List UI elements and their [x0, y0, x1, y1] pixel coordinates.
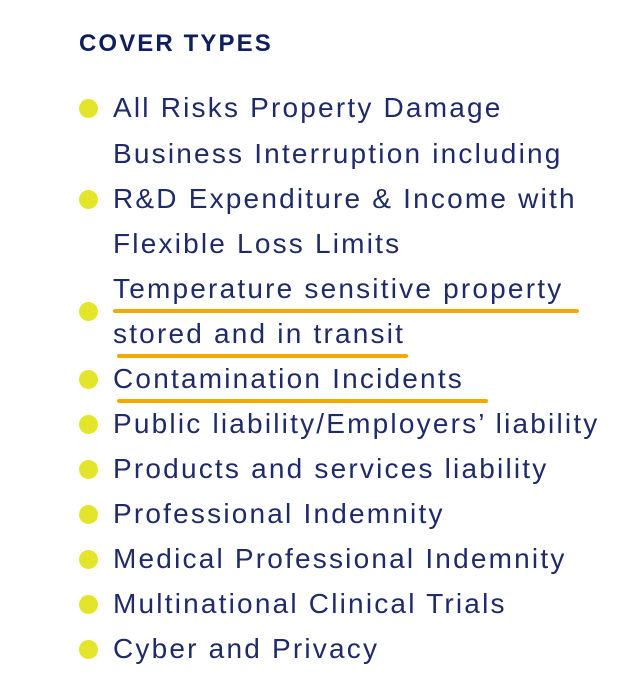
bullet — [79, 99, 98, 118]
underline — [117, 399, 488, 403]
bullet — [79, 302, 98, 321]
underline — [117, 354, 408, 358]
bullet — [79, 550, 98, 569]
item text: Cyber and Privacy — [113, 633, 379, 664]
item text: Products and services liability — [113, 453, 548, 484]
item text: Multinational Clinical Trials — [113, 588, 507, 619]
item text: Contamination Incidents — [113, 363, 464, 394]
bullet — [79, 640, 98, 659]
underline — [113, 309, 579, 313]
bullet — [79, 595, 98, 614]
item text: R&D Expenditure & Income with — [113, 183, 577, 214]
item text: Professional Indemnity — [113, 498, 445, 529]
bullet — [79, 370, 98, 389]
item text: Temperature sensitive property — [113, 273, 563, 304]
bullet — [79, 505, 98, 524]
title: COVER TYPES — [79, 30, 273, 57]
bullet — [79, 190, 98, 209]
bullet — [79, 415, 98, 434]
bullet — [79, 460, 98, 479]
item text: stored and in transit — [113, 318, 405, 349]
item text: All Risks Property Damage — [113, 92, 503, 123]
item text: Public liability/Employers’ liability — [113, 408, 600, 439]
item text: Medical Professional Indemnity — [113, 543, 567, 574]
item text: Business Interruption including — [113, 138, 563, 169]
item text: Flexible Loss Limits — [113, 228, 401, 259]
